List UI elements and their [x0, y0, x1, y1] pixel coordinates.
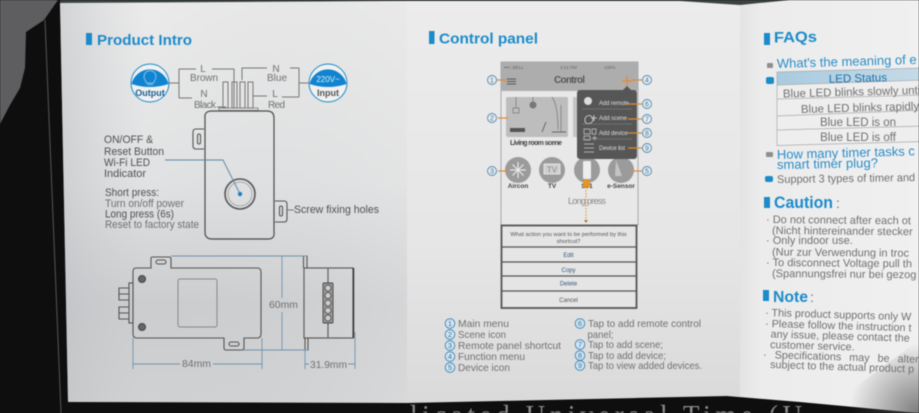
LED status table	[766, 68, 919, 146]
legend: left column: Scene icon	[458, 329, 506, 341]
shortcut dialog: shortcut?	[557, 239, 581, 245]
legend: right column: Tap to view added devices.	[588, 360, 702, 372]
legend: left column: 2	[448, 330, 452, 339]
FAQ question: timer tasks	[765, 143, 916, 186]
text: button description: Long press (6s)	[105, 208, 174, 220]
phone screen: 4:21 PM	[560, 65, 577, 70]
text: note list: subject to the actual product p	[770, 359, 914, 376]
callout numbers: 6	[645, 102, 649, 108]
device dimension drawing	[119, 256, 355, 371]
heading: caution: :	[836, 195, 840, 211]
FAQ question: timer tasks: Support 3 types of timer and	[777, 172, 915, 186]
device icons row: TV	[548, 183, 557, 190]
label: screw fixing holes: Screw fixing holes	[294, 204, 379, 216]
wiring diagram: Red	[268, 100, 285, 111]
legend: right column: 9	[578, 361, 582, 370]
device dimension drawing: 84mm	[182, 358, 211, 370]
heading: note: :	[810, 289, 814, 305]
text: caution list: · To disconnect Voltage pull th	[766, 257, 912, 270]
dark function menu: Add remote	[599, 101, 630, 107]
text: caution list: · Do not connect after each ot	[766, 214, 911, 227]
dark function menu: Device list	[599, 146, 625, 152]
legend: right column: Tap to add device;	[588, 350, 666, 362]
FAQ question: LED meaning: What's the meaning of e	[777, 52, 917, 71]
heading: FAQs: FAQs	[774, 29, 817, 46]
callout numbers	[488, 76, 652, 176]
phone screen: 100%	[604, 65, 616, 70]
legend: left column: Remote panel shortcut	[458, 340, 561, 352]
wiring diagram: Blue	[267, 73, 287, 84]
phone screen	[501, 62, 638, 225]
LED status table: Blue LED is on	[820, 117, 896, 129]
shortcut dialog: Delete	[560, 282, 578, 288]
heading: product intro: Product Intro	[97, 32, 192, 49]
icon: input circle	[309, 64, 347, 102]
wiring diagram: L	[272, 89, 278, 100]
phone screen: Living room scene	[510, 140, 562, 147]
wiring diagram: L	[200, 64, 206, 75]
shortcut dialog: What action you want to be performed by this	[510, 232, 627, 238]
text: caution list	[766, 214, 916, 281]
wiring diagram: N	[200, 89, 208, 100]
legend: left column: Function menu	[458, 351, 525, 363]
section: FAQs, caution, note	[763, 29, 919, 376]
device icons row	[505, 157, 635, 190]
legend: right column: 6	[578, 319, 582, 328]
device front view	[165, 111, 294, 239]
legend: left column: Main menu	[458, 318, 509, 330]
text: button description: Turn on/off power	[105, 198, 184, 210]
text: button description: Reset Button	[104, 146, 164, 158]
legend: right column: panel;	[588, 329, 614, 341]
wiring diagram: Black	[194, 100, 217, 111]
LED status table: Blue LED blinks slowly unti	[783, 85, 919, 100]
legend: left column	[445, 318, 561, 374]
LED status table: LED Status	[829, 72, 887, 86]
paper: middle panel	[407, 1, 740, 403]
text: button description: ON/OFF &	[104, 134, 154, 146]
LED status table: Blue LED is off	[820, 132, 897, 144]
section: control panel	[429, 30, 702, 374]
callout numbers: 4	[645, 78, 649, 84]
text: caution list: · Only indoor use.	[766, 235, 853, 247]
text: button description: Indicator	[104, 168, 146, 180]
text: button description: Short press:	[105, 187, 159, 199]
callout numbers: 1	[490, 78, 494, 84]
heading: caution: Caution	[774, 194, 833, 212]
phone screen: Long press	[568, 196, 606, 206]
shortcut dialog: Cancel	[559, 298, 578, 304]
section: product intro	[86, 32, 379, 371]
phone screen: •••○ BELL	[504, 65, 524, 70]
LED status table: Blue LED blinks rapidly	[801, 101, 919, 116]
device dimension drawing: 60mm	[269, 299, 298, 311]
callout numbers: 5	[645, 168, 649, 176]
legend: left column: 4	[448, 352, 452, 361]
text: note list: · This product supports only W	[765, 307, 912, 323]
legend: left column: 3	[448, 341, 452, 350]
shortcut dialog	[502, 226, 636, 308]
heading: note: Note	[773, 289, 808, 306]
wiring diagram: N	[272, 64, 280, 75]
scene image	[506, 97, 568, 137]
callout numbers: 2	[490, 116, 494, 122]
text: button description: Reset to factory state	[105, 219, 199, 231]
phone screen: Control	[554, 75, 585, 86]
callout numbers: 7	[645, 116, 649, 124]
device icons row: S01	[581, 183, 593, 190]
text: note list: · Please follow the instruction t	[765, 318, 912, 334]
legend: right column: Tap to add remote control	[588, 318, 701, 330]
shortcut dialog: Edit	[563, 253, 574, 259]
icon: output circle: Output	[135, 88, 165, 98]
wiring diagram: Brown	[190, 73, 218, 84]
device icons row: TV	[547, 166, 558, 174]
legend: right column: Tap to add scene;	[588, 339, 663, 351]
FAQ question: timer tasks: smart timer plug?	[777, 155, 878, 172]
shortcut dialog: Copy	[561, 268, 576, 274]
callout numbers: 9	[645, 146, 649, 152]
legend: left column: Device icon	[458, 362, 510, 374]
icon: input circle: 220V~	[316, 75, 340, 84]
heading: note	[763, 289, 814, 306]
device icons row: e-Sensor	[607, 183, 635, 190]
dark function menu: Add scene	[599, 116, 628, 122]
legend: right column	[575, 318, 702, 372]
icon: output circle	[131, 64, 169, 102]
legend: right column: 7	[578, 340, 582, 349]
text: note list: customer service.	[770, 339, 855, 354]
text: note list: any issue, please contact the	[770, 329, 910, 345]
paper: right panel	[727, 0, 919, 413]
legend: left column: 1	[448, 319, 452, 328]
callout numbers: 8	[645, 130, 649, 138]
text: button description: Wi-Fi LED	[104, 157, 150, 169]
device icons row: Aircon	[508, 183, 528, 190]
icon: input circle: Input	[317, 88, 339, 98]
legend: right column: 8	[578, 351, 582, 360]
text: button description	[104, 134, 199, 231]
FAQ question: timer tasks: How many timer tasks c	[777, 143, 916, 162]
heading: control panel: Control panel	[439, 30, 538, 48]
callout numbers: 3	[490, 168, 494, 176]
wiring diagram	[169, 64, 309, 111]
text: caution list: (Nur zur Verwendung in troc	[772, 247, 910, 260]
legend: left column: 5	[448, 363, 452, 372]
text: caution list: (Spannungsfrei nur bei gezog	[772, 268, 916, 281]
dark function menu	[577, 86, 637, 159]
text: note list	[763, 307, 919, 376]
paper: left panel	[60, 1, 407, 403]
dark function menu: Add device	[599, 131, 629, 137]
device dimension drawing: 31.9mm	[310, 359, 347, 371]
text: caution list: (Nicht hintereinander stecker	[772, 225, 913, 238]
